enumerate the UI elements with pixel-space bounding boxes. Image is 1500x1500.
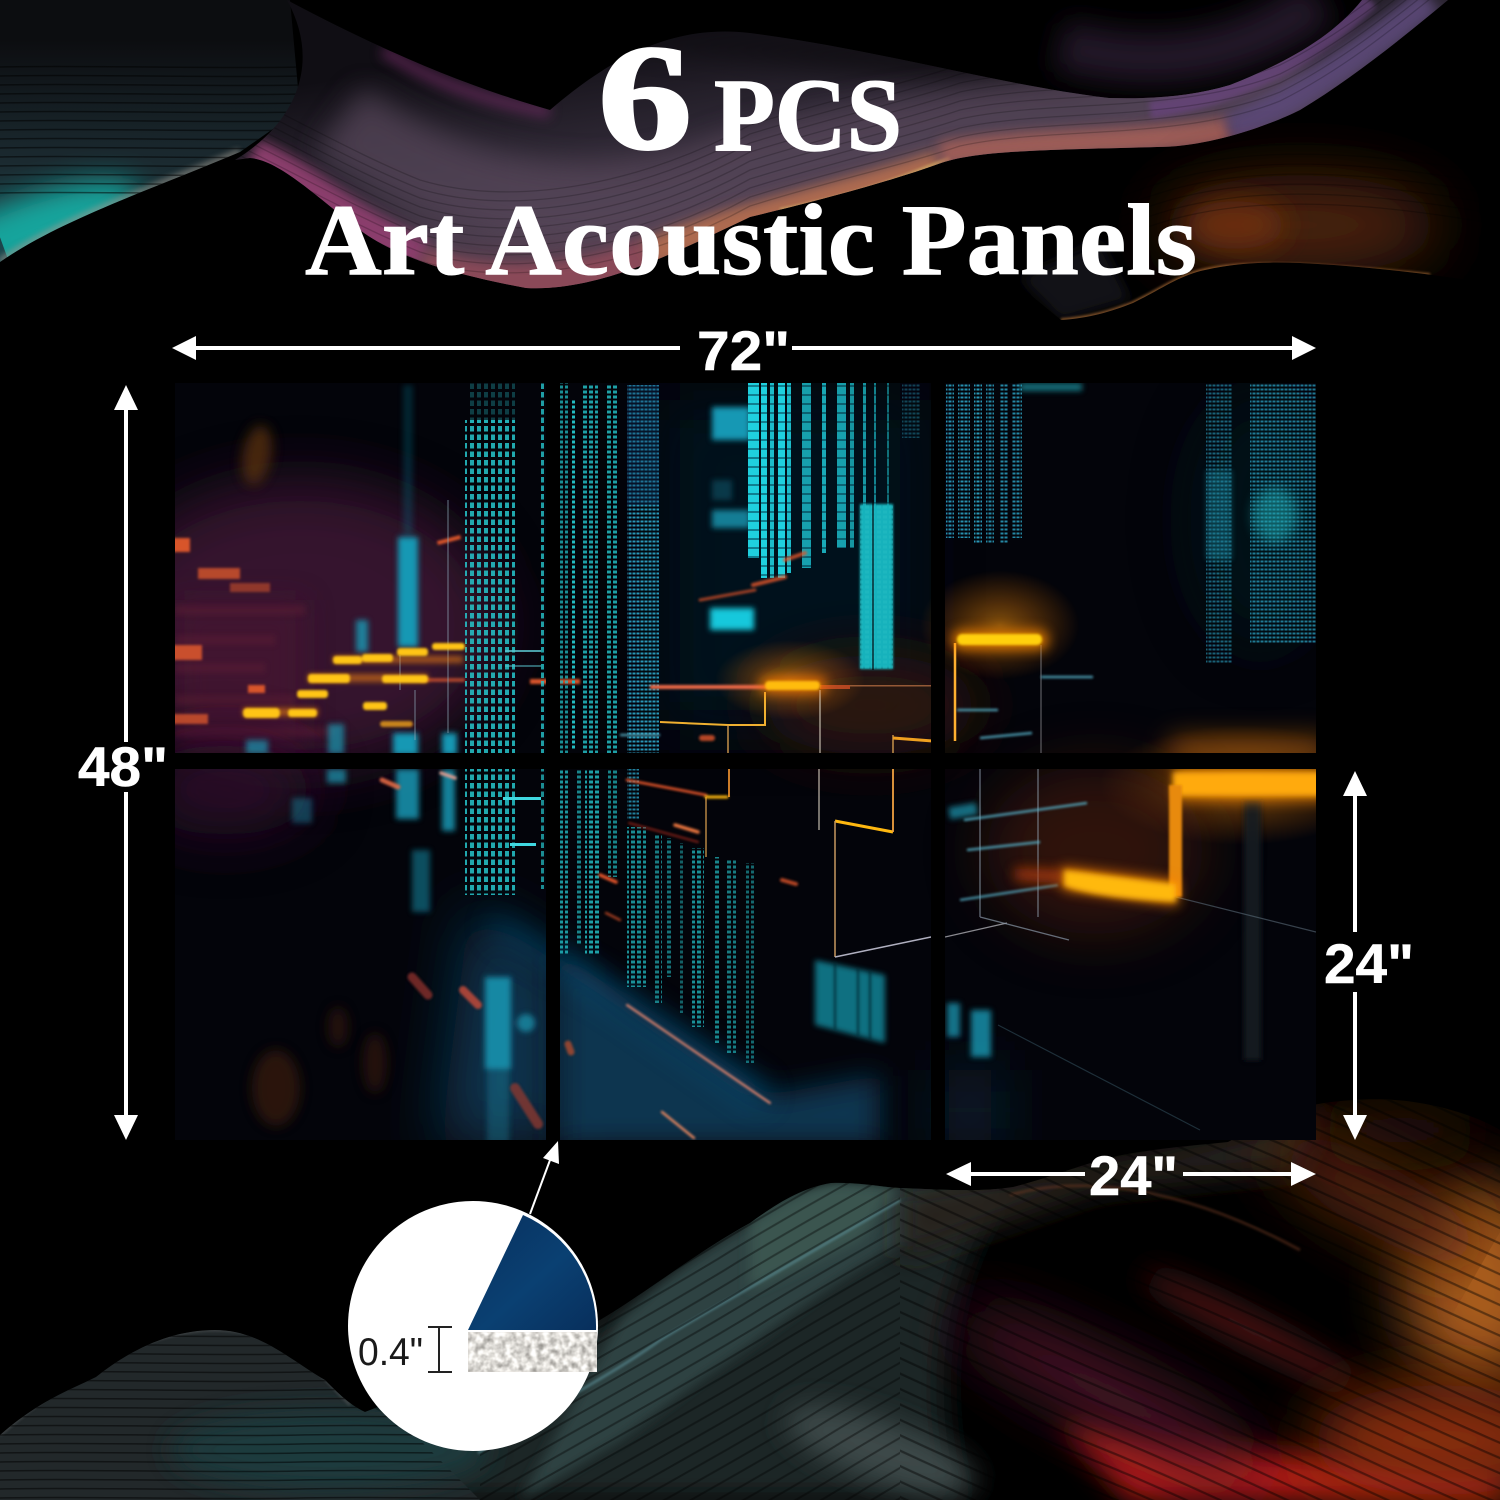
wave: dark base under ridge [375,1226,986,1500]
title unit: PCS [714,58,902,173]
title subtitle: Art Acoustic Panels [305,184,1197,297]
background waves bottom [0,1100,1500,1500]
wave: main pink mauve ribbon [235,0,1448,288]
dimension: total width 72 inches: 72" [697,319,790,382]
dimension: total width 72 inches [172,319,1316,382]
panel: top right [906,383,1316,753]
panel: bottom left [175,769,878,1140]
title number: 6 [598,15,692,181]
wave: glowing thin line [478,1200,900,1453]
dimension: panel width 24 inches [946,1144,1316,1207]
wave: brown orange right [1025,142,1462,320]
dimension: panel width 24 inches: 24" [1089,1144,1178,1207]
dimension: total height 48 inches [78,385,168,1140]
wave line texture [480,1100,1500,1500]
panel: top left [175,383,546,753]
dimension: total height 48 inches: 48" [78,735,168,798]
wave: teal gray rising [520,1183,1000,1500]
wave: dim interior right [1060,0,1320,58]
callout arrow [530,1141,559,1214]
wave: teal left [0,0,298,262]
fabric face sector [468,1215,596,1330]
panel grid [100,380,1380,1150]
wave: warm colours [1060,1420,1500,1500]
wave: left hump [0,1330,480,1500]
panel: bottom right [901,769,1316,1140]
thickness bracket [428,1327,452,1372]
panel: bottom middle [560,769,931,1140]
foam core [468,1332,597,1372]
background waves top [0,0,1500,320]
panel: top middle [560,383,931,753]
callout: panel thickness detail [348,1201,598,1451]
thickness label: 0.4" [358,1331,423,1374]
dimension: panel height 24 inches: 24" [1324,932,1414,995]
title [305,15,1197,297]
dimension: panel height 24 inches [1324,771,1414,1140]
